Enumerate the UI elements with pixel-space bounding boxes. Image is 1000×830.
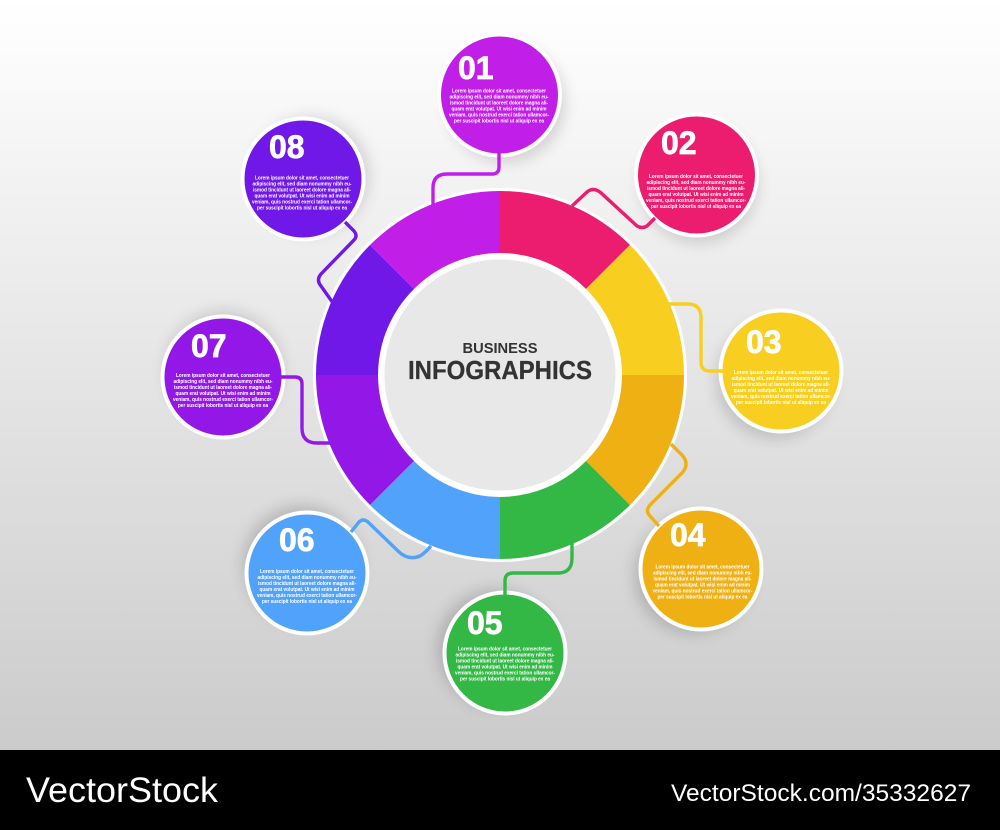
callout 05: adipiscing elit, sed diam nonummy nibh eu- bbox=[456, 653, 555, 659]
segment 07 bbox=[316, 375, 414, 505]
callout 04 bbox=[635, 444, 762, 633]
callout 05: 05 bbox=[467, 605, 503, 641]
callout 02: ismod tincidunt ut laoreet dolore magna ali- bbox=[647, 186, 745, 192]
callout 05 bbox=[438, 543, 572, 714]
callout 04: adipiscing elit, sed diam nonummy nibh eu- bbox=[653, 570, 752, 576]
callout 02: veniam, quis nostrud exerci tation ullamcor- bbox=[646, 198, 746, 204]
callout 05: per suscipit lobortis nisl ut aliquip ex ea bbox=[460, 677, 550, 683]
callout 04: quam erat volutpat. Ut wisi enim ad minim bbox=[655, 582, 750, 588]
callout 04: ismod tincidunt ut laoreet dolore magna ali- bbox=[654, 576, 752, 582]
callout 03: 03 bbox=[746, 324, 782, 360]
callout 06: 06 bbox=[279, 522, 315, 558]
title line: business: BUSINESS bbox=[462, 340, 538, 357]
callout 07: per suscipit lobortis nisl ut aliquip ex ea bbox=[178, 403, 268, 409]
callout 04: per suscipit lobortis nisl ut aliquip ex ea bbox=[658, 594, 748, 600]
callout 07 bbox=[162, 311, 331, 443]
footer image id: VectorStock.com/35332627 bbox=[671, 780, 971, 807]
callout 01: adipiscing elit, sed diam nonummy nibh eu- bbox=[450, 94, 549, 100]
callout 02: adipiscing elit, sed diam nonummy nibh eu- bbox=[646, 180, 746, 186]
callout 01: quam erat volutpat. Ut wisi enim ad minim bbox=[452, 106, 547, 112]
segment 05 bbox=[500, 461, 630, 559]
callout 03: quam erat volutpat. Ut wisi enim ad minim bbox=[734, 388, 829, 394]
callout 01: ismod tincidunt ut laoreet dolore magna ali- bbox=[450, 100, 548, 106]
callout 03: per suscipit lobortis nisl ut aliquip ex ea bbox=[736, 400, 826, 406]
callout 04: 04 bbox=[670, 517, 706, 553]
callout 02: per suscipit lobortis nisl ut aliquip ex ea bbox=[651, 204, 741, 210]
callout 04: veniam, quis nostrud exerci tation ullamcor- bbox=[652, 588, 753, 594]
center circle bbox=[382, 257, 618, 493]
callout 02 bbox=[572, 114, 757, 242]
callout 07: 07 bbox=[191, 328, 227, 364]
callout 08: per suscipit lobortis nisl ut aliquip ex ea bbox=[257, 206, 347, 212]
callout 08: veniam, quis nostrud exerci tation ullamcor- bbox=[252, 200, 352, 206]
callout 03: adipiscing elit, sed diam nonummy nibh eu- bbox=[732, 376, 831, 382]
callout 05: Lorem ipsum dolor sit amet, consectetuer bbox=[458, 647, 552, 653]
callout 04: Lorem ipsum dolor sit amet, consectetuer bbox=[656, 564, 750, 570]
callout 01: 01 bbox=[458, 50, 494, 86]
segment 01 bbox=[370, 191, 500, 289]
callout 01: veniam, quis nostrud exerci tation ullamcor- bbox=[449, 112, 549, 118]
callout 01 bbox=[433, 34, 564, 206]
callout 07: adipiscing elit, sed diam nonummy nibh eu- bbox=[174, 379, 273, 385]
callout 07: ismod tincidunt ut laoreet dolore magna ali- bbox=[174, 385, 272, 391]
callout 08: 08 bbox=[269, 129, 305, 165]
callout 05: ismod tincidunt ut laoreet dolore magna ali- bbox=[456, 659, 554, 665]
callout 07: Lorem ipsum dolor sit amet, consectetuer bbox=[176, 373, 270, 379]
callout 05: veniam, quis nostrud exerci tation ullamcor- bbox=[455, 671, 555, 677]
segment 03 bbox=[586, 245, 684, 375]
callout 08: quam erat volutpat. Ut wisi enim ad minim bbox=[254, 194, 350, 200]
donut chart bbox=[313, 188, 687, 562]
center title bbox=[408, 340, 592, 385]
callout 06: adipiscing elit, sed diam nonummy nibh eu- bbox=[258, 575, 357, 581]
callout 06: quam erat volutpat. Ut wisi enim ad minim bbox=[260, 587, 355, 593]
callout 03: veniam, quis nostrud exerci tation ullamcor- bbox=[731, 394, 831, 400]
callout 03 bbox=[668, 304, 842, 438]
callout 06 bbox=[244, 506, 431, 634]
callout 02: Lorem ipsum dolor sit amet, consectetuer bbox=[649, 174, 743, 180]
callout 02: 02 bbox=[661, 125, 697, 161]
callout 08: ismod tincidunt ut laoreet dolore magna ali- bbox=[253, 188, 351, 194]
segment 04 bbox=[586, 375, 684, 505]
footer bar bbox=[0, 750, 1000, 830]
callout 02: quam erat volutpat. Ut wisi enim ad minim bbox=[648, 192, 744, 198]
callout 03: ismod tincidunt ut laoreet dolore magna ali- bbox=[732, 382, 830, 388]
callout 06: per suscipit lobortis nisl ut aliquip ex ea bbox=[262, 599, 352, 605]
callout 08: Lorem ipsum dolor sit amet, consectetuer bbox=[255, 176, 349, 182]
callout 06: Lorem ipsum dolor sit amet, consectetuer bbox=[260, 569, 354, 575]
segment 02 bbox=[500, 191, 630, 289]
callout 06: ismod tincidunt ut laoreet dolore magna ali- bbox=[258, 581, 356, 587]
callout 06: veniam, quis nostrud exerci tation ullamcor- bbox=[257, 593, 357, 599]
callout 07: veniam, quis nostrud exerci tation ullamcor- bbox=[173, 397, 273, 403]
callout 08: adipiscing elit, sed diam nonummy nibh eu- bbox=[252, 182, 352, 188]
callout 01: per suscipit lobortis nisl ut aliquip ex ea bbox=[454, 118, 544, 124]
callout 05: quam erat volutpat. Ut wisi enim ad minim bbox=[458, 665, 553, 671]
segment 08 bbox=[316, 245, 414, 375]
callout 07: quam erat volutpat. Ut wisi enim ad minim bbox=[176, 391, 271, 397]
callout 01: Lorem ipsum dolor sit amet, consectetuer bbox=[452, 88, 546, 94]
footer logo: VectorStock bbox=[26, 771, 219, 810]
title line: infographics: INFOGRAPHICS bbox=[408, 357, 592, 385]
callout 08 bbox=[242, 117, 369, 303]
segment 06 bbox=[370, 461, 500, 559]
callout 03: Lorem ipsum dolor sit amet, consectetuer bbox=[734, 370, 828, 376]
